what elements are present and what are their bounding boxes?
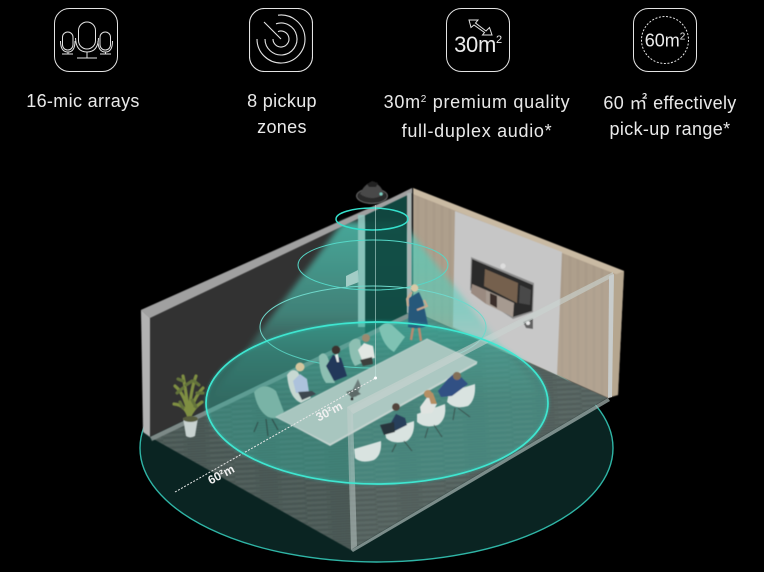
label: 30 square metre audio bbox=[384, 92, 570, 141]
pickup rings bbox=[260, 208, 486, 368]
icon: 30 square metre audio: 2 bbox=[496, 34, 502, 46]
icon: 30 square metre audio: 30m bbox=[454, 32, 496, 57]
icon: 60 square metre range: 2 bbox=[680, 32, 686, 42]
drop line from microphone bbox=[374, 205, 376, 378]
person with light hair bbox=[287, 362, 316, 403]
inner 30 m zone fill bbox=[206, 322, 548, 484]
conference table bbox=[276, 339, 477, 446]
chair: empty left bbox=[254, 386, 284, 436]
ring: third bbox=[260, 286, 486, 368]
centre dot bbox=[374, 376, 377, 380]
back right wall with panel and display bbox=[413, 188, 624, 398]
room floor bbox=[150, 311, 608, 550]
label: 60 square metre range bbox=[603, 93, 737, 139]
glass front wall bbox=[347, 272, 614, 552]
label: 60 square metre range: pick-up range* bbox=[610, 119, 730, 139]
label: 30 square metre audio: 30m2 premium quality bbox=[384, 92, 570, 112]
potted plant bbox=[174, 376, 203, 438]
left dark wall bbox=[141, 188, 413, 437]
ring: upper small bbox=[336, 208, 408, 230]
label: 16-mic arrays: 16-mic arrays bbox=[26, 91, 140, 111]
person in white shirt bbox=[349, 334, 375, 366]
icon: 60 square metre range: 60m bbox=[645, 30, 680, 50]
display screen bbox=[470, 257, 534, 319]
icon: 60 square metre range bbox=[633, 8, 697, 72]
left wall frame bbox=[141, 188, 413, 441]
laptop and tabletop mic bbox=[346, 379, 361, 400]
label: 30 square metre audio: full-duplex audio* bbox=[402, 121, 552, 141]
icon: 30 square metre audio bbox=[446, 8, 510, 72]
ring: second bbox=[298, 240, 448, 290]
chair: empty front bbox=[354, 441, 381, 462]
icon: microphone array bbox=[54, 8, 118, 72]
radius dashed line bbox=[175, 378, 376, 492]
ceiling microphone bbox=[356, 181, 388, 204]
standing presenter bbox=[407, 284, 428, 341]
front row chairs and people bbox=[354, 372, 475, 462]
icon: pickup zones radar bbox=[249, 8, 313, 72]
bright 30 m ring bbox=[206, 322, 548, 484]
wall panel bbox=[453, 211, 562, 375]
label: 8 pickup zones bbox=[247, 91, 317, 137]
person in navy suit bbox=[319, 346, 347, 383]
wall device bbox=[523, 318, 533, 329]
chair with person: right bbox=[438, 372, 475, 420]
pickup cone bbox=[206, 222, 548, 403]
dark back column bbox=[365, 193, 407, 334]
chair with person: navy bbox=[380, 403, 414, 452]
back row chairs and people bbox=[254, 323, 405, 436]
label: 60 m radius: 60²m bbox=[205, 462, 237, 487]
chair: empty right bbox=[379, 323, 405, 352]
wall socket bbox=[346, 270, 359, 287]
label: 30 m radius: 30²m bbox=[313, 399, 345, 424]
label: 8 pickup zones: 8 pickup bbox=[247, 91, 317, 111]
label: 60 square metre range: 60 ㎡ effectively bbox=[603, 93, 737, 113]
label: 8 pickup zones: zones bbox=[257, 117, 307, 137]
outer 60 m pickup ellipse bbox=[140, 334, 613, 562]
chair with person: blonde bbox=[417, 390, 445, 438]
